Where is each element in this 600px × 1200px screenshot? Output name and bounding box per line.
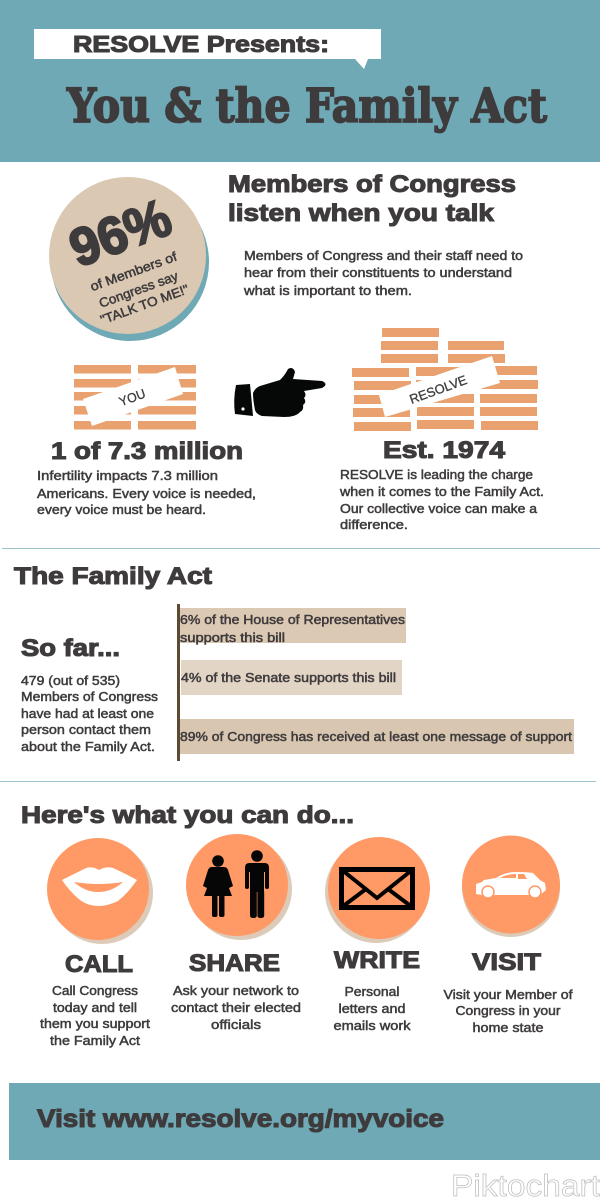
action: write: letters and bbox=[338, 1001, 406, 1016]
action: visit: Congress in your bbox=[456, 1003, 561, 1018]
action: write: Personal bbox=[344, 984, 400, 999]
text: 479 of 535: have had at least one bbox=[21, 706, 154, 721]
heading: members of congress listen: listen when you talk bbox=[228, 200, 495, 227]
title: You & the Family Act bbox=[66, 79, 547, 134]
footer band bbox=[9, 1083, 600, 1160]
icon: share people bbox=[186, 834, 292, 940]
intro paragraph: hear from their constituents to understand bbox=[244, 265, 512, 280]
action: share bbox=[171, 950, 301, 1032]
action: write: WRITE bbox=[334, 947, 420, 974]
speech bubble bbox=[34, 29, 381, 69]
stat circle: 96%: 96% bbox=[62, 188, 179, 279]
action: visit bbox=[444, 949, 573, 1035]
text: infertility: Infertility impacts 7.3 million bbox=[37, 468, 218, 483]
text: 479 of 535: person contact them bbox=[21, 722, 151, 737]
bar: congress bbox=[180, 719, 574, 754]
action: call: CALL bbox=[65, 951, 133, 978]
stat: 1 of 7.3 million: 1 of 7.3 million bbox=[51, 438, 243, 465]
footer band: Visit www.resolve.org/myvoice bbox=[37, 1105, 444, 1133]
text: infertility bbox=[37, 468, 256, 517]
icon: write envelope bbox=[325, 837, 430, 943]
text: 479 of 535: Members of Congress bbox=[21, 689, 159, 704]
action: call bbox=[40, 951, 150, 1048]
text: 479 of 535 bbox=[21, 673, 159, 754]
text: infertility: every voice must be heard. bbox=[37, 502, 206, 517]
bar: congress: 89% of Congress has received at least one message of support bbox=[180, 729, 572, 744]
heading: members of congress listen: Members of Congress bbox=[228, 171, 516, 198]
text: resolve leading: RESOLVE is leading the charge bbox=[340, 467, 533, 482]
stat circle: 96%: Congress say bbox=[97, 268, 181, 311]
action: visit: home state bbox=[472, 1020, 544, 1035]
action: visit: Visit your Member of bbox=[444, 987, 573, 1002]
text: resolve leading: difference. bbox=[340, 517, 408, 532]
bar: house bbox=[180, 608, 406, 645]
header band bbox=[0, 0, 600, 162]
bar: senate bbox=[181, 660, 402, 695]
icon: RESOLVE brick pile: RESOLVE bbox=[407, 372, 469, 407]
action: share: SHARE bbox=[189, 950, 280, 977]
bar: house: supports this bill bbox=[180, 630, 285, 645]
action: write bbox=[334, 947, 420, 1033]
action: call: today and tell bbox=[53, 1000, 137, 1015]
stat circle: 96% bbox=[49, 177, 209, 341]
icon: RESOLVE brick pile bbox=[352, 328, 538, 431]
heading: here's what you can do: Here's what you can do... bbox=[21, 802, 354, 829]
text: resolve leading: when it comes to the Family Act. bbox=[339, 484, 544, 499]
action: share: officials bbox=[211, 1017, 262, 1032]
action: write: emails work bbox=[334, 1018, 411, 1033]
stat circle: 96%: "TALK TO ME!" bbox=[98, 281, 191, 327]
icon: visit car bbox=[462, 836, 560, 937]
heading: the family act: The Family Act bbox=[14, 563, 212, 590]
text: 479 of 535: 479 (out of 535) bbox=[21, 673, 120, 688]
text: resolve leading: Our collective voice can make a bbox=[340, 501, 538, 516]
heading: members of congress listen bbox=[228, 171, 516, 227]
text: infertility: Americans. Every voice is needed, bbox=[37, 486, 256, 501]
action: share: contact their elected bbox=[171, 1000, 301, 1015]
intro paragraph bbox=[243, 248, 523, 298]
icon: pointing hand bbox=[234, 368, 326, 417]
speech bubble: RESOLVE Presents: bbox=[73, 31, 329, 57]
action: call: them you support bbox=[40, 1016, 150, 1031]
intro paragraph: what is important to them. bbox=[243, 283, 412, 298]
heading: so far: So far... bbox=[21, 635, 120, 662]
text: 479 of 535: about the Family Act. bbox=[21, 739, 155, 754]
icon: call lips bbox=[47, 838, 153, 944]
bar: house: 6% of the House of Representatives bbox=[180, 612, 406, 627]
stat: Est. 1974: Est. 1974 bbox=[383, 437, 506, 464]
action: call: the Family Act bbox=[50, 1033, 140, 1048]
action: call: Call Congress bbox=[52, 983, 139, 998]
text: resolve leading bbox=[339, 467, 544, 532]
stat circle: 96%: of Members of bbox=[88, 249, 179, 294]
icon: YOU brick pile: YOU bbox=[117, 386, 147, 409]
intro paragraph: Members of Congress and their staff need to bbox=[244, 248, 523, 263]
action: visit: VISIT bbox=[472, 949, 541, 976]
bar chart: support for the bill bbox=[177, 604, 574, 761]
action: share: Ask your network to bbox=[173, 983, 299, 998]
icon: YOU brick pile bbox=[74, 365, 196, 430]
bar: senate: 4% of the Senate supports this bill bbox=[181, 670, 396, 685]
